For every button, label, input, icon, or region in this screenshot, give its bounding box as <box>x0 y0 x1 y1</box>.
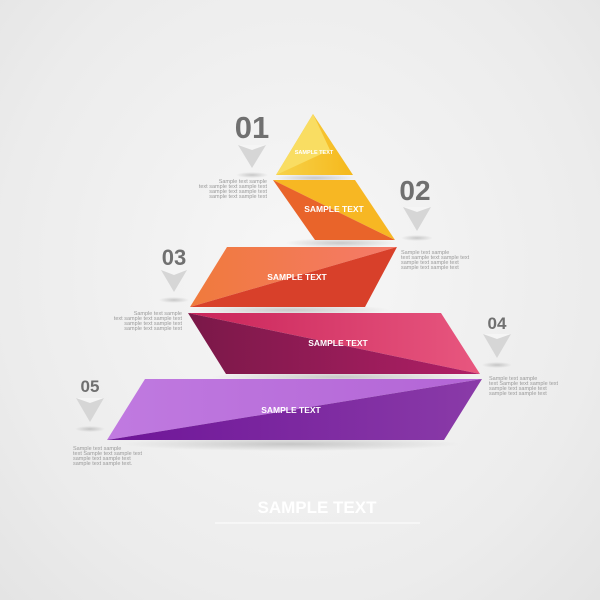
text block 05: text Sample text sample text <box>73 451 143 457</box>
marker 05 <box>75 377 105 432</box>
text block 04: text Sample text sample text <box>489 381 559 387</box>
tier 2: SAMPLE TEXT <box>304 204 365 214</box>
text block 05: sample text sample text <box>73 456 131 462</box>
marker 03 <box>159 245 189 303</box>
text block 03: sample text sample text <box>124 326 182 332</box>
text block 05: sample text sample text. <box>73 461 133 467</box>
text block 03: text sample text sample text <box>114 316 182 322</box>
text block 02: text sample text sample text <box>401 255 470 261</box>
tier 4 <box>188 313 480 383</box>
text block 05 <box>73 446 143 467</box>
tier 1 <box>275 114 355 182</box>
text block 04: sample text sample text <box>489 386 547 392</box>
marker 01 <box>235 110 269 178</box>
marker 01: 01 <box>235 110 269 145</box>
text block 02: sample text sample text <box>401 265 459 271</box>
marker 05: 05 <box>81 377 99 396</box>
text block 04 <box>489 376 559 397</box>
text block 01: text sample text sample text <box>199 184 267 190</box>
marker 02: 02 <box>399 175 431 206</box>
text block 01: sample text sample text <box>209 189 267 195</box>
text block 01: Sample text sample <box>219 179 267 185</box>
text block 02 <box>401 250 470 271</box>
tier 2 <box>273 180 395 248</box>
bottom title: SAMPLE TEXT <box>257 498 377 517</box>
marker 04 <box>482 314 512 368</box>
text block 03: sample text sample text <box>124 321 182 327</box>
marker 03: 03 <box>162 245 186 270</box>
text block 03 <box>114 311 182 332</box>
tier 4: SAMPLE TEXT <box>308 338 369 348</box>
text block 02: sample text sample text <box>401 260 459 266</box>
marker 02 <box>399 175 433 241</box>
tier 3: SAMPLE TEXT <box>267 272 328 282</box>
marker 04: 04 <box>488 314 507 333</box>
text block 04: sample text sample text <box>489 391 547 397</box>
text block 02: Sample text sample <box>401 250 449 256</box>
text block 03: Sample text sample <box>134 311 182 317</box>
tier 3 <box>190 247 397 316</box>
text block 04: Sample text sample <box>489 376 537 382</box>
text block 01: sample text sample text <box>209 194 267 200</box>
tier 1: SAMPLE TEXT <box>295 150 334 156</box>
tier 5 <box>107 379 482 451</box>
tier 5: SAMPLE TEXT <box>261 405 322 415</box>
text block 05: Sample text sample <box>73 446 121 452</box>
text block 01 <box>199 179 267 200</box>
